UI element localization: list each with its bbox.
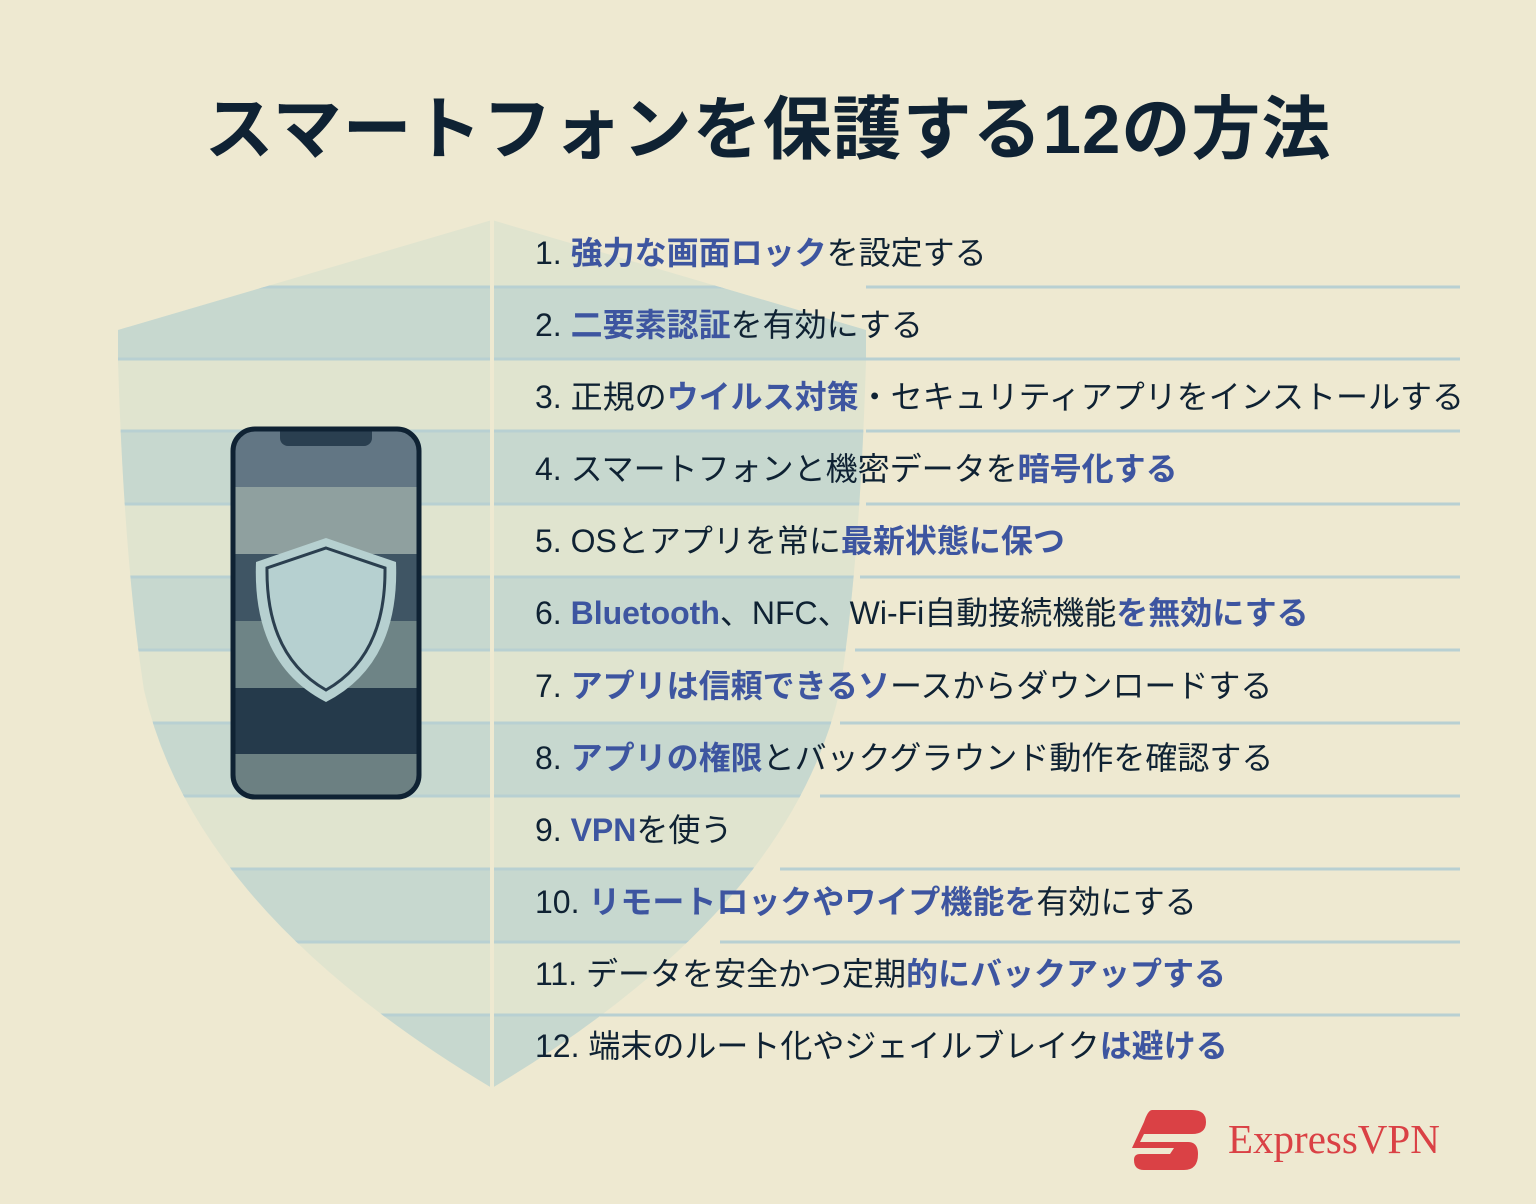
background shield with bands <box>118 220 1460 1087</box>
icon: smartphone with shield <box>230 426 422 800</box>
title: スマートフォンを保護する12の方法 <box>205 91 1331 168</box>
list items <box>535 235 1464 1064</box>
text: 9. VPNを使う <box>535 812 732 848</box>
text: 1. 強力な画面ロックを設定する <box>535 235 987 271</box>
text: 6. Bluetooth、NFC、Wi-Fi自動接続機能を無効にする <box>535 595 1309 631</box>
text: 12. 端末のルート化やジェイルブレイクは避ける <box>535 1028 1228 1064</box>
text: 3. 正規のウイルス対策・セキュリティアプリをインストールする <box>535 379 1464 415</box>
text: 5. OSとアプリを常に最新状態に保つ <box>535 523 1065 559</box>
text: 7. アプリは信頼できるソースからダウンロードする <box>535 668 1272 704</box>
text: 4. スマートフォンと機密データを暗号化する <box>535 451 1178 487</box>
text: 10. リモートロックやワイプ機能を有効にする <box>535 884 1197 920</box>
text: 11. データを安全かつ定期的にバックアップする <box>535 956 1226 992</box>
logo: ExpressVPN <box>1132 1110 1440 1170</box>
text: 2. 二要素認証を有効にする <box>535 307 923 343</box>
logo: ExpressVPN: ExpressVPN <box>1228 1116 1440 1162</box>
text: 8. アプリの権限とバックグラウンド動作を確認する <box>535 740 1273 776</box>
